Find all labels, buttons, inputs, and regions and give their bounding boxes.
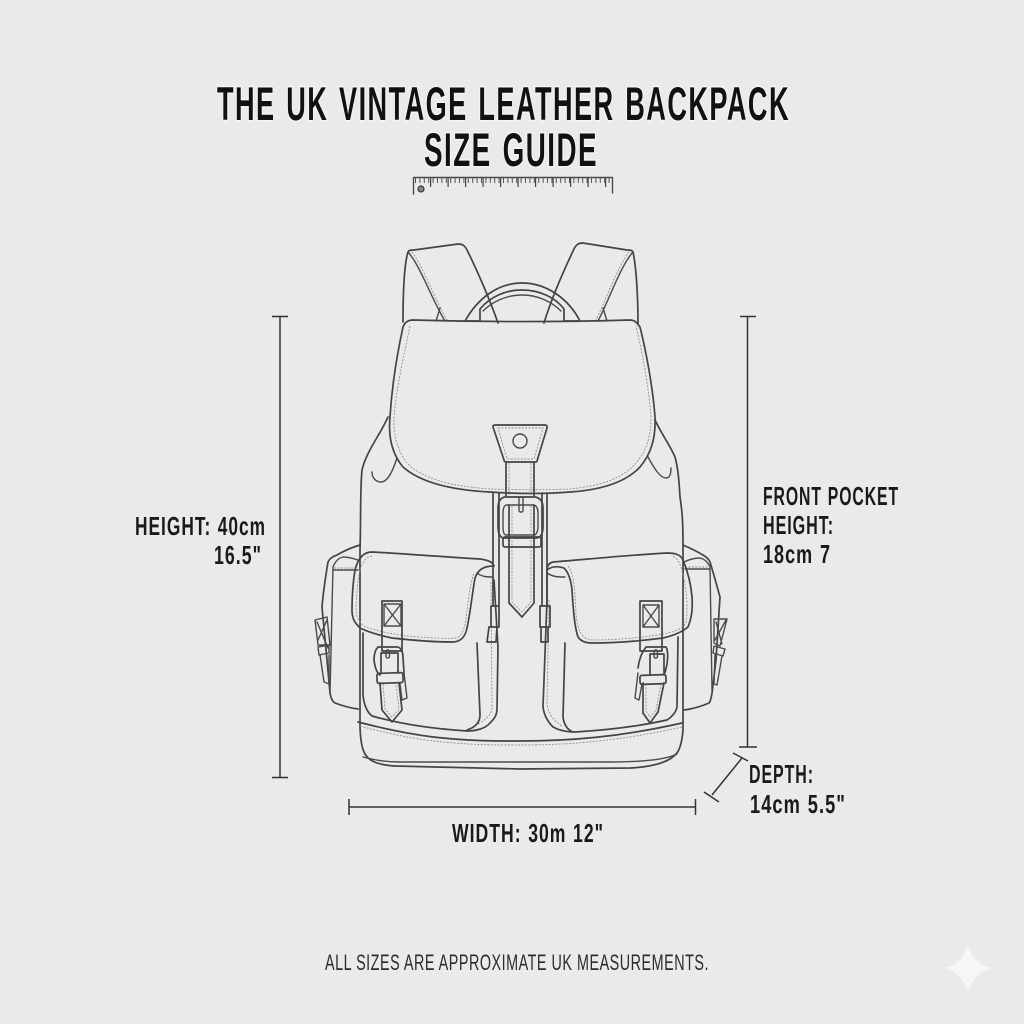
left pocket buckle strap	[374, 601, 407, 722]
width label: WIDTH: 30m 12"	[452, 818, 604, 848]
right front pocket	[543, 553, 692, 732]
left front pocket	[352, 552, 498, 731]
flap tab with snap	[493, 425, 547, 462]
depth label: 14cm 5.5"	[750, 789, 846, 819]
left shoulder strap	[403, 244, 498, 323]
title: SIZE GUIDE	[424, 123, 598, 176]
center buckle strap	[498, 462, 543, 617]
height label	[135, 511, 266, 570]
right side pocket	[683, 545, 720, 710]
depth label	[749, 759, 846, 819]
center vertical straps	[487, 493, 550, 642]
depth label: DEPTH:	[749, 759, 814, 789]
front pocket label: 18cm 7	[763, 539, 831, 569]
top carry handle	[465, 283, 580, 321]
left side pocket	[322, 545, 360, 709]
right side buckle	[713, 619, 727, 685]
width dimension line	[349, 799, 696, 815]
icon: sparkle	[944, 944, 993, 993]
backpack illustration	[315, 243, 727, 769]
right shoulder strap	[544, 243, 638, 324]
main body	[358, 417, 683, 769]
title	[217, 77, 790, 176]
footer note: ALL SIZES ARE APPROXIMATE UK MEASUREMENTS.	[325, 950, 709, 975]
height dimension line	[272, 316, 288, 778]
front pocket label: FRONT POCKET	[763, 481, 899, 511]
right pocket buckle strap	[635, 601, 668, 723]
front pocket label: HEIGHT:	[763, 510, 834, 540]
front flap	[390, 320, 655, 494]
icon: ruler	[414, 178, 612, 194]
left side buckle	[315, 617, 330, 684]
depth dimension line	[704, 753, 748, 802]
height label: HEIGHT: 40cm	[135, 511, 266, 541]
front pocket dimension line	[739, 316, 757, 747]
height label: 16.5"	[214, 540, 262, 570]
front pocket label	[763, 481, 899, 569]
